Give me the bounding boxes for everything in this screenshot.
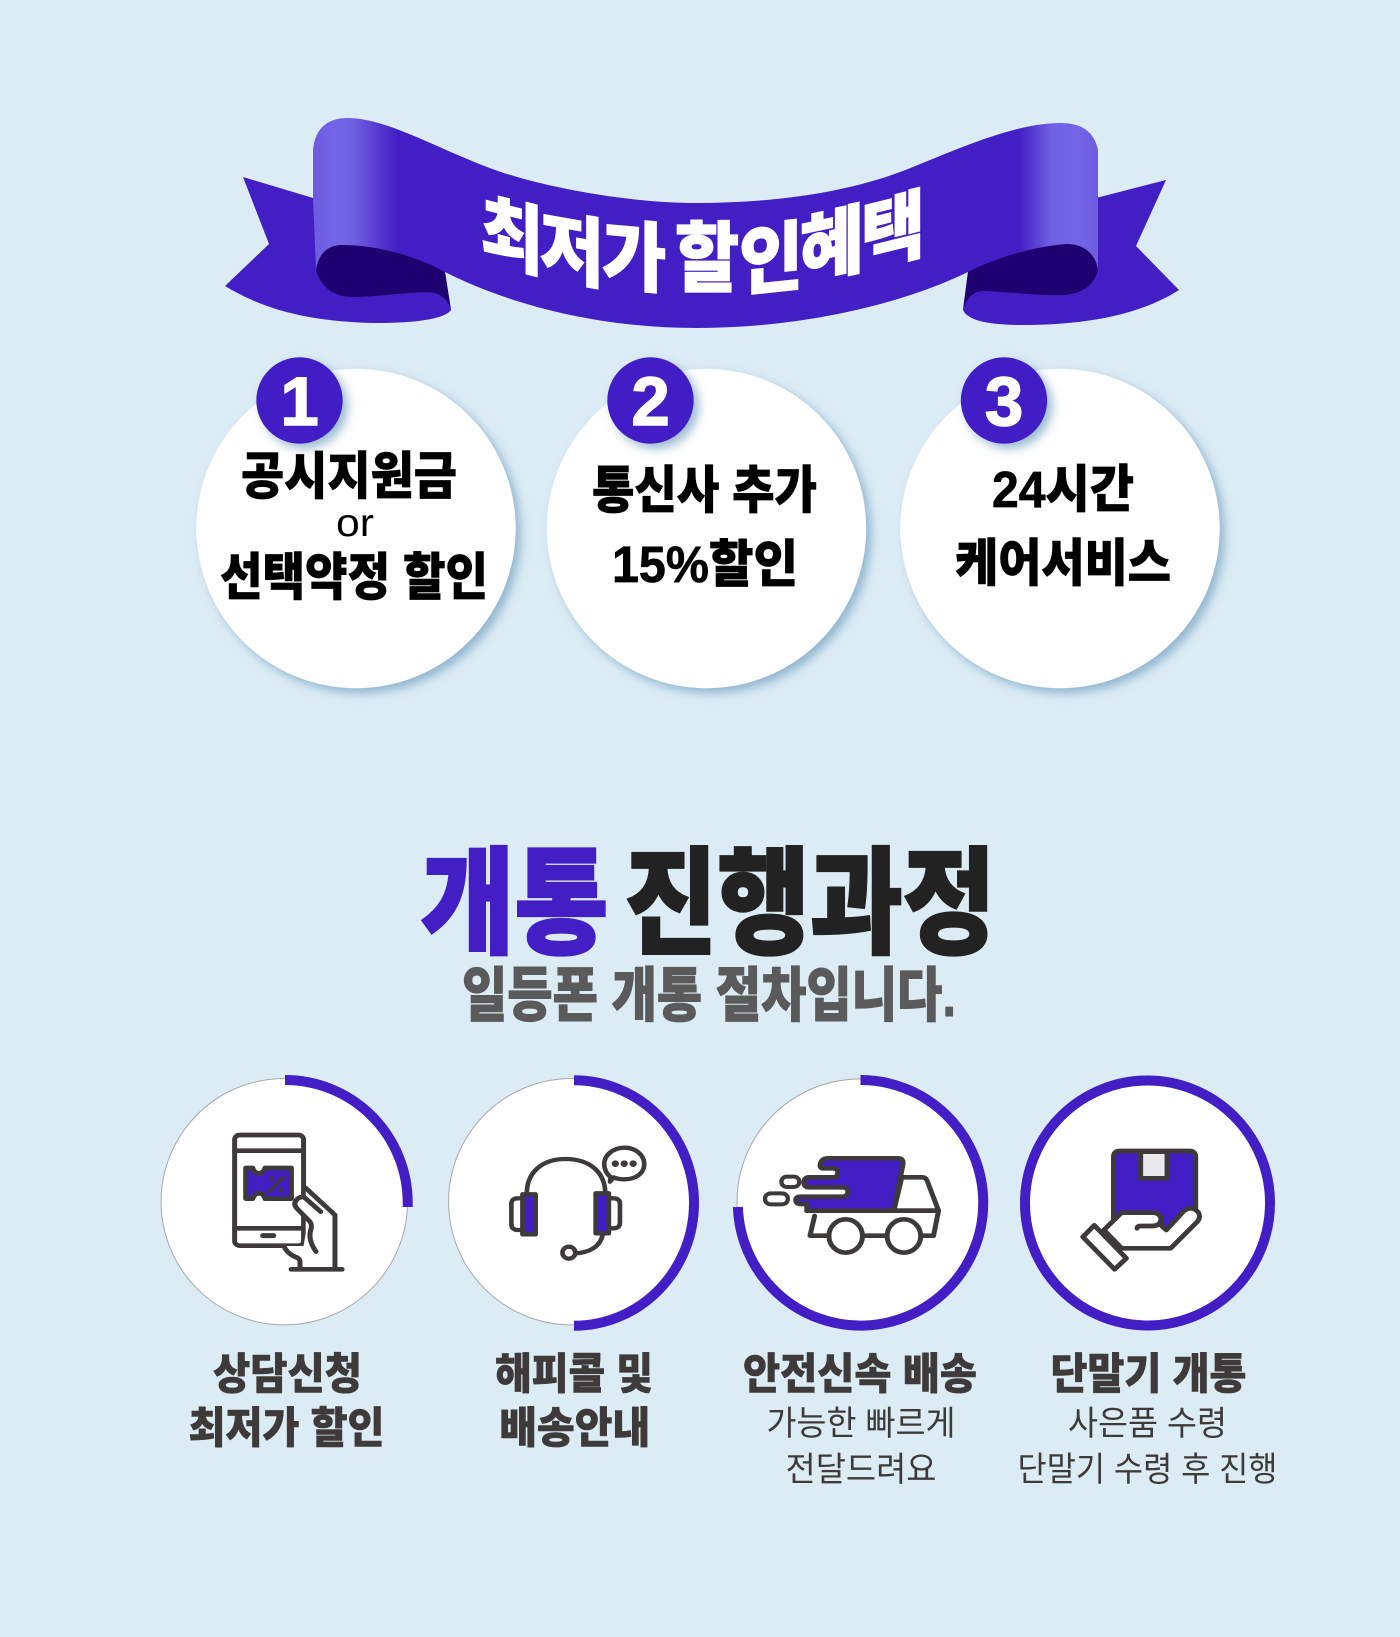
ribbon title: 저 xyxy=(540,202,604,299)
benefit 1 text: 선택약정 할인 xyxy=(220,549,488,606)
ribbon main band xyxy=(313,118,1098,328)
benefit circle 1 xyxy=(196,369,516,688)
number badge 2: 2 xyxy=(631,363,670,440)
step 1 label xyxy=(188,1351,384,1453)
step 2 label: 해피콜 및 xyxy=(495,1351,653,1399)
step 3 label: 가능한 빠르게 xyxy=(766,1405,956,1443)
step 1 ring xyxy=(161,1078,408,1325)
number badge 1 xyxy=(256,357,343,444)
step 1 label: 상담신청 xyxy=(213,1351,362,1399)
step 4 label xyxy=(1018,1351,1278,1489)
benefit 3 text: 케어서비스 xyxy=(955,535,1171,592)
benefit 1 text: or xyxy=(336,502,374,545)
icon: hand holding box xyxy=(1083,1151,1199,1269)
benefit circle 3 xyxy=(900,369,1220,688)
section heading: 개통 xyxy=(420,839,608,969)
section heading xyxy=(420,839,996,969)
benefit 1 text xyxy=(220,448,488,606)
ribbon left tail xyxy=(225,177,451,323)
ribbon title: 가 xyxy=(602,213,666,303)
benefit 1 xyxy=(196,357,516,688)
number badge 2 xyxy=(607,357,694,444)
step 2 label: 배송안내 xyxy=(499,1405,650,1453)
step 2 ring xyxy=(449,1078,695,1326)
benefit circle 2 xyxy=(547,369,866,688)
ribbon right tail xyxy=(963,180,1179,325)
ribbon title: 인 xyxy=(739,214,803,306)
ribbon left fold xyxy=(316,245,451,310)
ribbon title xyxy=(481,181,925,306)
step 3 label xyxy=(743,1351,977,1489)
ribbon banner xyxy=(225,118,1179,328)
ribbon right fold xyxy=(963,244,1098,310)
step 3 label: 안전신속 배송 xyxy=(743,1351,977,1399)
ribbon title: 최 xyxy=(481,187,543,287)
benefit 2 text: 15%할인 xyxy=(612,536,798,593)
icon: headset with speech bubble xyxy=(511,1148,644,1259)
step 4 ring xyxy=(1025,1080,1270,1326)
benefit 2 xyxy=(547,357,866,688)
section subheading: 일등폰 개통 절차입니다. xyxy=(462,963,956,1029)
step 3 ring xyxy=(737,1079,983,1326)
benefit 3 xyxy=(900,357,1220,688)
number badge 3: 3 xyxy=(985,363,1023,440)
benefit 2 text xyxy=(592,462,817,593)
benefit 2 text: 통신사 추가 xyxy=(592,462,817,519)
step 2 label xyxy=(495,1351,653,1453)
step 4 label: 사은품 수령 xyxy=(1068,1405,1227,1443)
icon: phone with discount coupon xyxy=(235,1135,342,1269)
step 4 label: 단말기 수령 후 진행 xyxy=(1018,1451,1278,1489)
icon: delivery truck xyxy=(765,1158,939,1253)
section heading: 진행과정 xyxy=(624,839,996,969)
benefit 3 text: 24시간 xyxy=(992,461,1134,518)
ribbon title: 혜 xyxy=(800,196,864,295)
benefit 3 text xyxy=(955,461,1171,592)
step 1 label: 최저가 할인 xyxy=(188,1405,384,1453)
step 3 label: 전달드려요 xyxy=(786,1451,936,1489)
ribbon title: 할 xyxy=(675,217,739,302)
step 4 label: 단말기 개통 xyxy=(1050,1351,1246,1399)
benefit 1 text: 공시지원금 xyxy=(241,448,457,505)
number badge 1: 1 xyxy=(280,363,319,440)
number badge 3 xyxy=(961,357,1047,444)
ribbon title: 택 xyxy=(861,181,925,282)
